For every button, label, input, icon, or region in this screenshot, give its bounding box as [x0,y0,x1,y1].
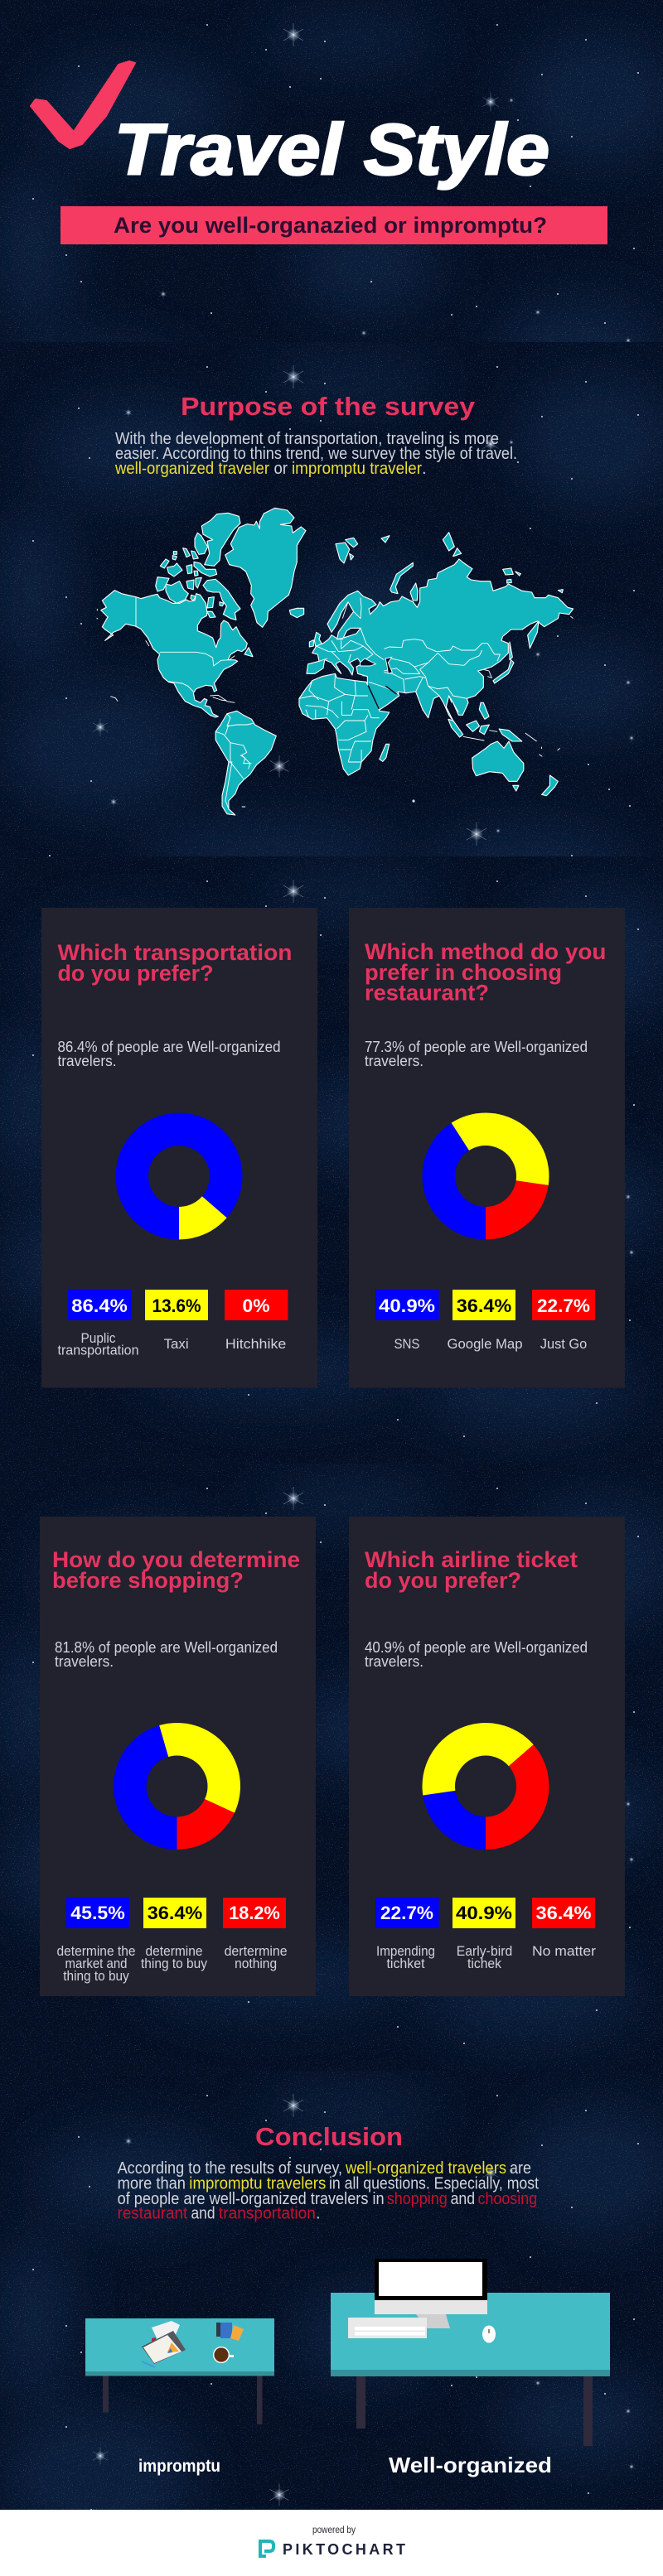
heading: purpose of the survey: Purpose of the survey [181,392,476,421]
legend labels: market and [65,1956,128,1971]
world map [97,508,573,815]
legend values: 22.7% [537,1295,590,1316]
illustration: well-organized desk [331,2259,610,2446]
heading: airline ticket [365,1547,578,1593]
legend labels: No matter [532,1944,597,1959]
footer: powered by [312,2524,356,2535]
conclusion text block: shopping [387,2190,448,2208]
legend values: 36.4% [457,1295,511,1316]
conclusion text block: . [316,2205,321,2223]
donut chart [114,1723,240,1850]
conclusion text block: well-organized travelers [345,2159,506,2178]
legend labels: SNS [394,1337,419,1352]
heading: transportation: do you prefer? [58,961,214,986]
legend values: 22.7% [380,1903,433,1923]
panel: shopping [40,1517,316,1996]
subtitle banner [60,206,607,244]
footer: PIKTOCHART [283,2541,405,2558]
heading: conclusion: Conclusion [255,2122,403,2151]
subtitle banner: Are you well-organazied or impromptu? [114,213,547,238]
summary text: 77.3% of people are Well-organized [365,1039,588,1055]
legend values [375,1898,595,1928]
legend labels: nothing [235,1956,277,1971]
donut chart [116,1113,242,1239]
legend labels [376,1944,597,1971]
conclusion text block: impromptu travelers [189,2175,326,2193]
legend labels: tichek [467,1956,502,1971]
heading: airline ticket: Which airline ticket [365,1547,578,1572]
conclusion text block: are [510,2159,531,2178]
legend values: 40.9% [456,1903,512,1923]
icon: keyboard [348,2318,427,2338]
summary text: 81.8% of people are Well-organized [55,1639,278,1656]
legend labels: determine the [56,1944,136,1959]
footer [0,2510,663,2576]
legend values [68,1290,288,1320]
legend values: 0% [242,1295,270,1316]
heading: restaurant: restaurant? [365,981,489,1006]
purpose text block: impromptu traveler [292,460,422,478]
legend labels: Puplic [81,1331,116,1346]
legend values [375,1290,595,1320]
conclusion text block: choosing [477,2190,537,2208]
title: Travel Style [114,109,549,191]
legend values: 86.4% [71,1295,128,1316]
panel: transportation [41,908,317,1388]
legend labels: transportation [58,1343,139,1358]
icon: piktochart logo [260,2541,273,2556]
legend labels [56,1944,288,1984]
summary text [365,1039,588,1069]
heading: restaurant: prefer in choosing [365,960,562,985]
conclusion text block: According to the results of survey, [118,2159,342,2178]
heading: shopping [52,1547,300,1593]
summary text: 40.9% of people are Well-organized [365,1639,588,1656]
donut chart [422,1112,549,1239]
heading: restaurant [365,939,607,1006]
summary text: travelers. [365,1653,423,1670]
legend labels: Just Go [540,1337,587,1352]
label: well-organized: Well-organized [389,2453,552,2477]
summary text: travelers. [55,1653,114,1670]
summary text: 86.4% of people are Well-organized [58,1039,280,1055]
map: Americas north and Greenland [97,508,325,717]
legend labels: tichket [386,1956,425,1971]
panel: restaurant [349,908,625,1388]
label: impromptu: impromptu [138,2457,220,2476]
legend labels: dertermine [225,1944,288,1959]
illustration: impromptu desk [85,2318,274,2424]
heading: shopping: How do you determine [52,1547,300,1572]
map: Eurasia [307,533,573,721]
donut chart [423,1723,549,1850]
conclusion text block: of people are well-organized travelers in [118,2190,385,2208]
legend labels: determine [146,1944,202,1959]
legend labels [58,1331,286,1358]
heading: airline ticket: do you prefer? [365,1568,521,1593]
panel: airline ticket [349,1517,625,1996]
conclusion text block: more than [118,2175,186,2193]
heading: restaurant: Which method do you [365,939,607,964]
legend labels: Hitchhike [225,1337,286,1352]
conclusion text block: and [451,2190,475,2208]
icon: mouse [482,2326,496,2342]
summary text [55,1639,278,1670]
summary text: travelers. [58,1053,116,1069]
heading: transportation: Which transportation [58,940,292,965]
summary text [365,1639,588,1670]
legend values: 13.6% [152,1295,201,1316]
conclusion text block: restaurant [118,2205,188,2223]
purpose text block: or [273,460,288,478]
heading: shopping: before shopping? [52,1568,244,1593]
purpose text block: well-organized traveler [114,460,269,478]
legend labels: Google Map [448,1337,522,1352]
legend values: 45.5% [70,1903,125,1923]
legend values: 18.2% [229,1903,280,1923]
legend values: 40.9% [379,1295,435,1316]
conclusion text block: and [191,2205,215,2223]
legend values: 36.4% [535,1903,592,1923]
conclusion text block [118,2159,539,2223]
purpose text block: With the development of transportation, traveling is more [115,430,499,448]
legend values: 36.4% [148,1903,202,1923]
icon: papers and notebook [142,2321,186,2367]
purpose text block: . [422,460,427,478]
icon: red check mark [31,61,135,148]
conclusion text block: in all questions. Especially, most [329,2175,539,2193]
conclusion text block: transportation [219,2205,316,2223]
purpose text block: easier. According to thins trend, we survey the style of travel. [115,445,517,463]
legend labels [394,1337,587,1352]
icon: computer monitor [375,2259,487,2328]
summary text [58,1039,280,1069]
purpose text block [114,430,517,478]
legend values [66,1898,286,1928]
icon: books [216,2323,244,2341]
legend labels: thing to buy [63,1969,129,1984]
icon: coffee cup [213,2347,234,2363]
legend labels: Impending [376,1944,435,1959]
legend labels: Taxi [164,1337,189,1352]
map: South America, Africa, Oceania [215,673,560,815]
summary text: travelers. [365,1053,423,1069]
legend labels: Early-bird [457,1944,512,1959]
legend labels: thing to buy [141,1956,208,1971]
heading: transportation [58,940,292,986]
